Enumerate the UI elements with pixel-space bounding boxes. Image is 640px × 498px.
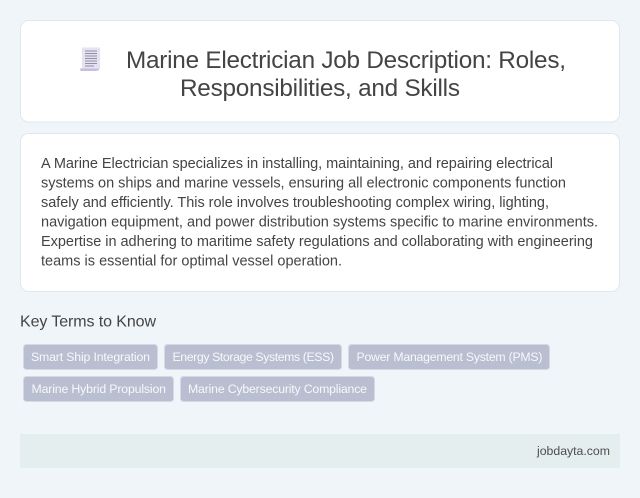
footer bar	[20, 434, 620, 468]
panel: title card	[20, 20, 620, 122]
description text: navigation equipment, and power distribution systems specific to marine environments.	[41, 214, 598, 230]
chip: marine cybersecurity compliance: Marine Cybersecurity Compliance	[188, 382, 367, 396]
chip: marine cybersecurity compliance	[180, 376, 374, 402]
title text: Responsibilities, and Skills	[180, 75, 460, 102]
chip: power management system: Power Management System (PMS)	[356, 350, 542, 364]
chip list: key terms	[24, 344, 550, 402]
footer text: jobdayta.com	[536, 444, 610, 458]
title text: Marine Electrician Job Description: Roles,	[126, 47, 566, 74]
description text: A Marine Electrician specializes in installing, maintaining, and repairing electrical	[41, 156, 553, 172]
description text: teams is essential for optimal vessel operation.	[41, 254, 342, 270]
chip: energy storage systems	[164, 344, 342, 370]
description text: safely and efficiently. This role involves troubleshooting complex wiring, lighting,	[41, 195, 549, 211]
chip: marine hybrid propulsion: Marine Hybrid Propulsion	[32, 382, 166, 396]
title text	[126, 47, 566, 102]
chip: energy storage systems: Energy Storage Systems (ESS)	[172, 350, 334, 364]
chip: smart ship integration: Smart Ship Integration	[31, 350, 150, 364]
icon: document scroll	[80, 48, 100, 71]
chip: power management system	[348, 344, 550, 370]
chip: marine hybrid propulsion	[24, 376, 174, 402]
heading: key terms: Key Terms to Know	[20, 314, 156, 330]
panel: description card	[20, 134, 620, 292]
description text	[41, 156, 598, 270]
chip: smart ship integration	[24, 344, 158, 370]
description text: Expertise in adhering to maritime safety regulations and collaborating with engineering	[41, 234, 593, 250]
description text: systems on ships and marine vessels, ensuring all electronic components function	[41, 176, 566, 192]
